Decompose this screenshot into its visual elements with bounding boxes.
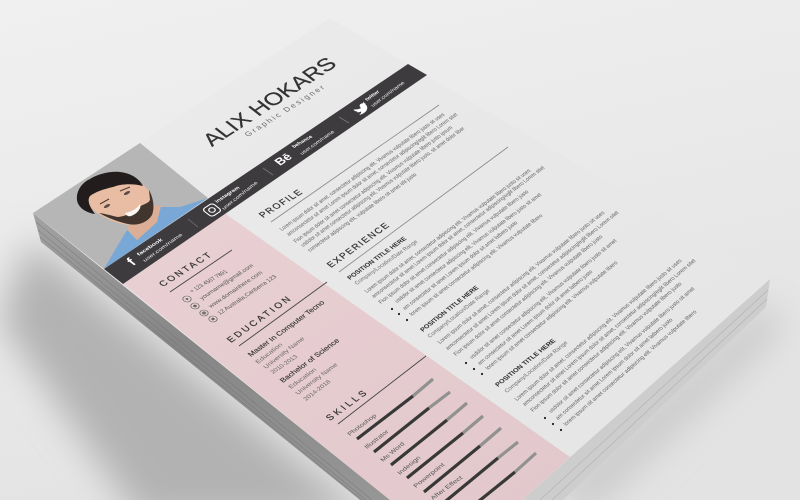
skill labels: Illustrator: [363, 428, 391, 450]
photo panel: [33, 143, 208, 269]
section: education: Education: [254, 341, 285, 365]
position 2: am consectetur sit amet Lorem ipsum dolor sit amet latbero justo: [476, 269, 594, 366]
behance item: user.com/name: [299, 130, 336, 156]
section: contact: www.domainhere.com: [207, 270, 265, 309]
section: education: 2014-2018: [302, 378, 333, 402]
section: education: Bachelor of Science: [278, 337, 342, 384]
position 1: Company/Location/Date Range: [353, 239, 420, 286]
skill labels: Photoshop: [346, 412, 379, 437]
section: contact: 12 Australia,Canberra 123: [216, 274, 279, 316]
section: experience: EXPERIENCE: [325, 221, 391, 269]
position 1: POSITION TITLE HERE: [346, 236, 409, 281]
position 2: POSITION TITLE HERE: [419, 285, 481, 333]
skill labels: Indesign: [396, 454, 423, 476]
skill bars: [357, 379, 536, 500]
section: education: [225, 282, 342, 402]
shadow under paper stack: [0, 240, 780, 500]
section: contact: + 123 4567 7891: [188, 269, 229, 294]
section: education: EDUCATION: [225, 295, 293, 344]
dark contact band: [104, 64, 427, 284]
position 3: [494, 258, 698, 430]
section: profile: consectetur adipiscing elit, vulputate libero sit amet elit justo: [307, 172, 418, 253]
section: education: 2010-2013: [269, 353, 300, 375]
position 3: POSITION TITLE HERE: [494, 338, 558, 388]
behance item: behance: [291, 134, 314, 149]
position 2: Fion ipsum dolor sit amet consectetur adipiscing elit. Vivamus vulputate libero justo: [452, 234, 604, 357]
section: education: University Name: [294, 362, 340, 397]
section: education: University Name: [262, 336, 307, 371]
behance item: Bē: [271, 151, 295, 168]
position 3: am consectetur sit amet Lorem ipsum dolor sit amet latbero justo: [554, 317, 674, 421]
section: education: Education: [287, 366, 319, 390]
skill labels: Powerpoint: [412, 461, 447, 489]
instagram item: [202, 180, 259, 217]
position 2: lorem ipsum sit amet consectetur adipiscing elit. Vivamus vulputate libero: [484, 260, 619, 371]
section: contact: [157, 250, 279, 323]
position 1: am consectetur sit amet Lorem ipsum dolor sit amet latbero justo: [401, 220, 519, 311]
paper stack: left side: [33, 213, 392, 500]
instagram item: instagram: [214, 185, 242, 204]
position 2: [419, 210, 621, 374]
position 1: Fion ipsum dolor sit amet consectetur adipiscing elit. Vivamus vulputate libero justo: [377, 189, 530, 305]
section: experience: [325, 147, 698, 430]
facebook item: [123, 232, 184, 268]
facebook item: facebook: [136, 237, 165, 257]
twitter item: [352, 81, 406, 116]
section: contact: CONTACT: [157, 251, 214, 288]
twitter item: user.com/name: [370, 81, 406, 108]
section: experience: usdolor sit amet consectetur adipiscing elit, Vivamus vulputate libero justo sit amet: [468, 237, 618, 360]
instagram item: user.com/name: [220, 180, 259, 211]
text: Lorem ipsum dolor sit amet, consectetur adipiscing elit. Vivamus vulputate libero justo sit uses: [363, 168, 532, 294]
skill labels: [346, 412, 465, 500]
section: skills: SKILLS: [324, 389, 369, 422]
twitter item: twitter: [364, 89, 382, 102]
portrait: [77, 172, 208, 269]
name heading: ALIX HOKARS: [198, 54, 342, 150]
contact icons: [181, 295, 219, 323]
facebook item: user.com/name: [141, 232, 184, 263]
job title: Graphic Designer: [242, 84, 327, 138]
section: contact: yourname@gmail.com: [198, 263, 256, 301]
facebook item: f: [123, 255, 140, 268]
section: profile: [257, 105, 466, 253]
position 1: lorem ipsum sit amet consectetur adipiscing elit. Vivamus vulputate libero: [408, 213, 544, 317]
section: skills: [324, 356, 536, 500]
section: experience: usdolor sit amet consectetur adipiscing elit, Vivamus vulputate libero justo sit amet: [393, 191, 543, 304]
paper stack: right side: [522, 279, 770, 500]
position 1: [346, 165, 547, 320]
pink sidebar: [123, 212, 570, 500]
position 2: Company/Location/Date Range: [426, 288, 492, 339]
skill labels: Ms Word: [379, 440, 407, 463]
behance item: [271, 130, 336, 168]
section: profile: PROFILE: [257, 188, 304, 219]
section: education: Master In Computer Tecno: [247, 300, 327, 358]
position 3: Company/Location/Date Range: [503, 340, 570, 394]
